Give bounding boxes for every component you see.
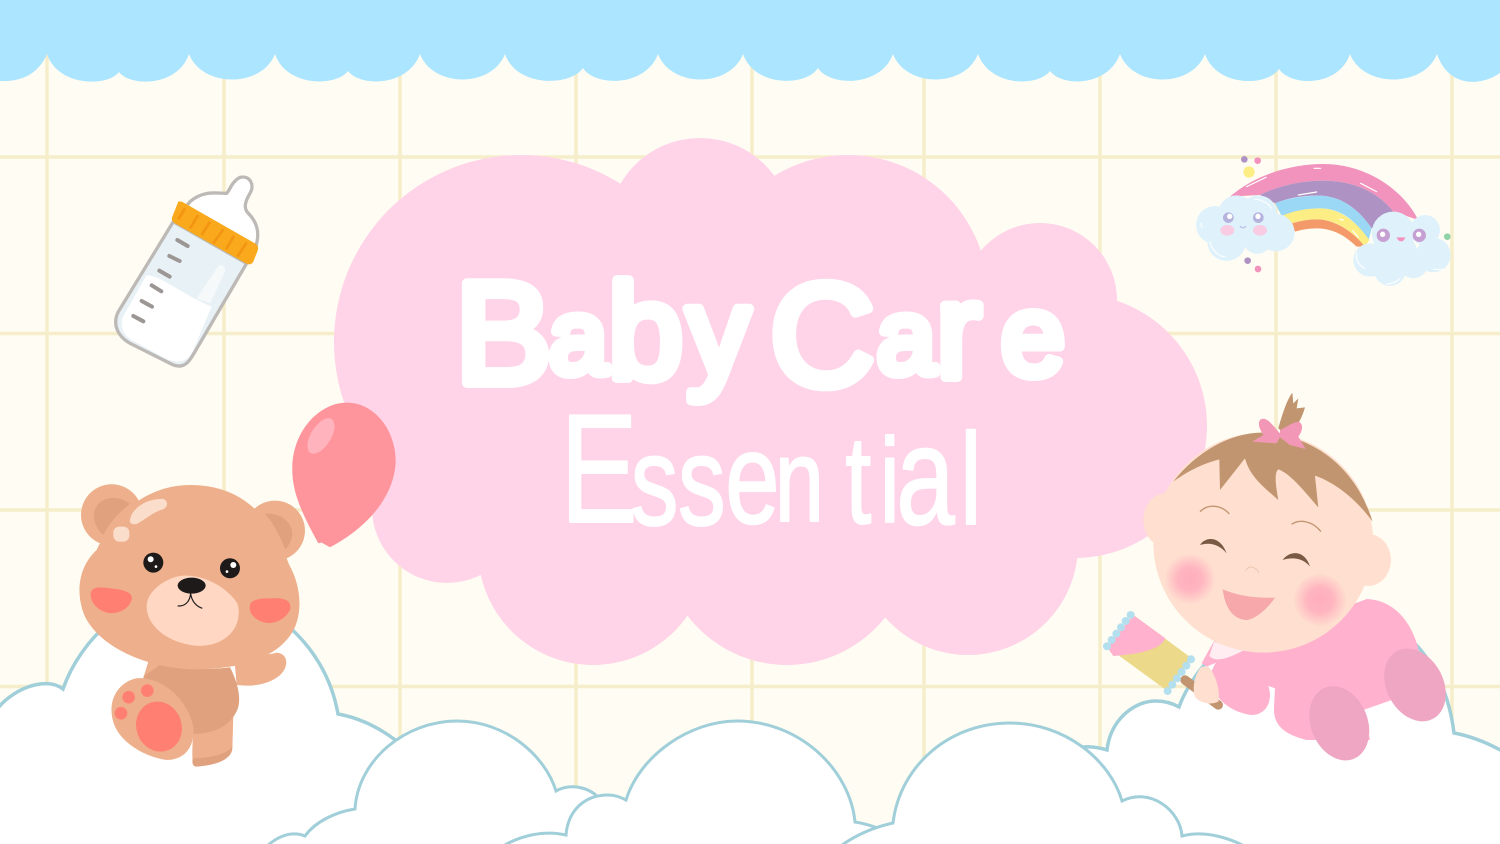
baby hand and collar bbox=[1194, 641, 1243, 703]
front cloud left bbox=[265, 721, 620, 844]
illustration: teddy bear bbox=[79, 484, 305, 767]
subtitle: Essential: s bbox=[631, 410, 678, 552]
icon: baby bottle bbox=[116, 177, 258, 366]
bear head bbox=[79, 485, 299, 669]
baby rattle bbox=[1103, 611, 1218, 705]
title: Baby Care: a bbox=[877, 279, 936, 396]
top scalloped awning bbox=[0, 0, 1500, 82]
back left cloud bbox=[0, 590, 398, 844]
subtitle: Essential: l bbox=[960, 407, 982, 552]
central pink cloud bbox=[334, 138, 1207, 665]
sparkle stars bbox=[1241, 156, 1451, 272]
bear ears bbox=[81, 484, 305, 561]
subtitle: Essential: n bbox=[775, 416, 824, 547]
right face cloud bbox=[1353, 212, 1451, 286]
bear face bbox=[91, 499, 290, 646]
subtitle: Essential: i bbox=[880, 415, 900, 548]
bear foot bbox=[111, 678, 193, 760]
bear body and arm bbox=[143, 647, 286, 767]
baby bow bbox=[1252, 419, 1306, 449]
title: Baby Care: B bbox=[455, 252, 552, 414]
title: Baby Care: r bbox=[936, 255, 981, 406]
front cloud centre bbox=[500, 721, 880, 844]
subtitle: Essential: e bbox=[725, 406, 779, 551]
title: Baby Care: C bbox=[770, 254, 875, 416]
baby hair bbox=[1173, 393, 1373, 522]
icon: balloon bbox=[292, 403, 396, 547]
baby head bbox=[1143, 433, 1391, 653]
title: Baby Care: b bbox=[608, 256, 683, 407]
baby suit bbox=[1211, 599, 1423, 740]
icon: rainbow with clouds bbox=[1196, 156, 1451, 286]
subtitle: Essential: E bbox=[560, 383, 638, 556]
illustration: baby bbox=[1103, 393, 1458, 769]
title: Baby Care: a bbox=[549, 279, 608, 396]
subtitle: Essential: s bbox=[678, 410, 726, 552]
title: Baby Care: y bbox=[687, 263, 750, 402]
baby legs bbox=[1299, 638, 1458, 769]
baby face bbox=[1164, 506, 1347, 627]
front cloud right bbox=[838, 723, 1248, 844]
left face cloud bbox=[1196, 195, 1295, 261]
subtitle: Essential: a bbox=[896, 398, 955, 555]
back right cloud bbox=[1084, 605, 1500, 844]
title: Baby Care: e bbox=[1001, 272, 1065, 400]
subtitle: Essential: t bbox=[845, 411, 871, 550]
